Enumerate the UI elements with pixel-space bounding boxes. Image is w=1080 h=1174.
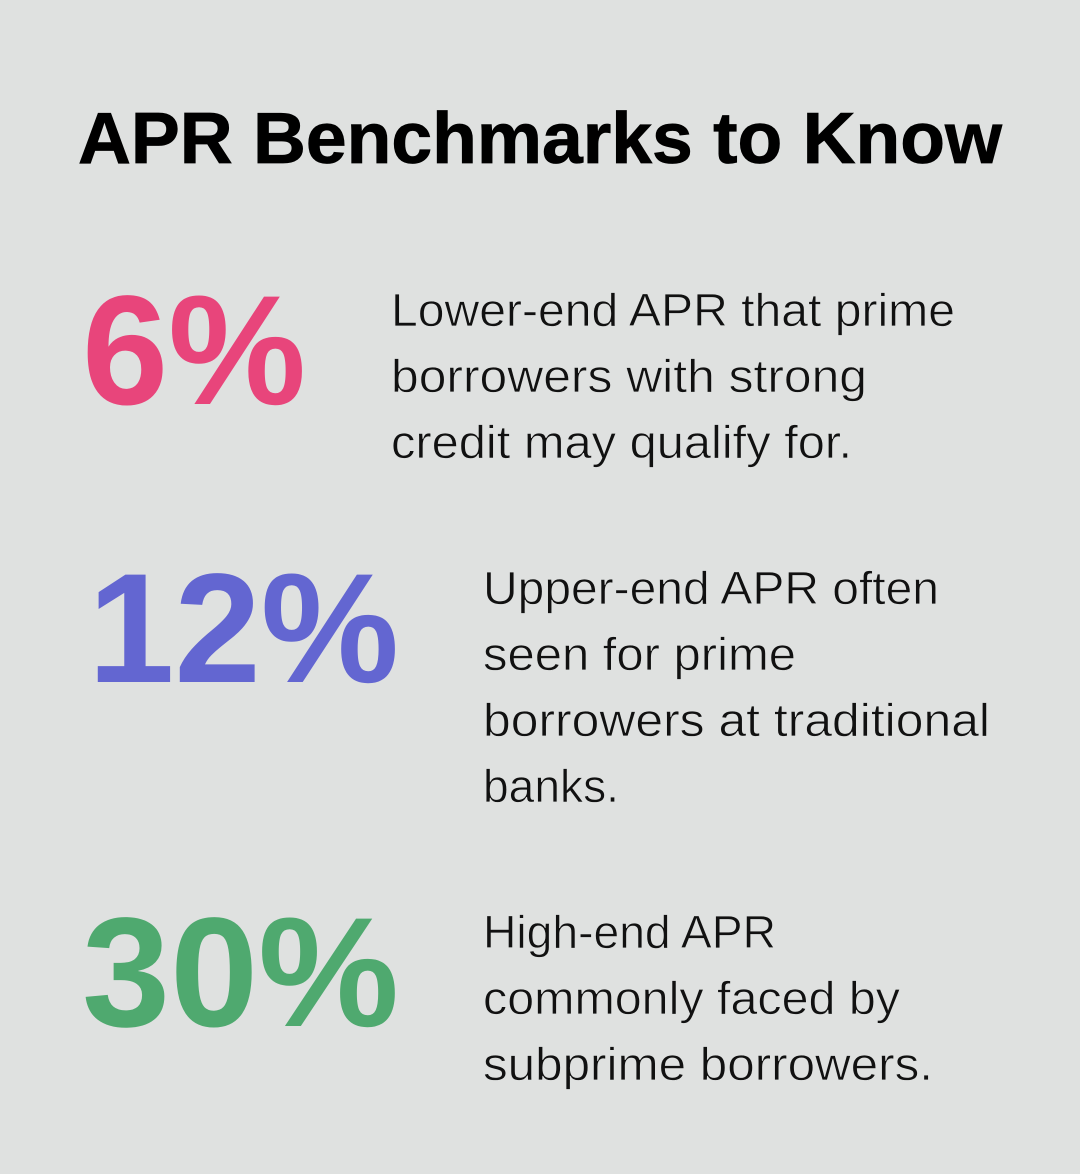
description: 30%: commonly faced by	[483, 972, 900, 1024]
stat: 12%	[88, 542, 990, 812]
description: 6%: Lower-end APR that prime	[391, 284, 955, 336]
description: 30%	[483, 906, 933, 1090]
description: 6%: credit may qualify for.	[391, 416, 852, 468]
stat: 6%	[82, 264, 955, 468]
number: 30%: 30%	[82, 886, 399, 1060]
description: 12%	[483, 562, 990, 812]
title: APR Benchmarks to Know	[78, 99, 1003, 179]
description: 30%: subprime borrowers.	[483, 1038, 933, 1090]
stat: 30%	[82, 886, 933, 1090]
description: 6%: borrowers with strong	[391, 350, 867, 402]
description: 12%: Upper-end APR often	[483, 562, 939, 614]
number: 6%: 6%	[82, 264, 306, 438]
description: 6%	[391, 284, 955, 468]
description: 30%: High-end APR	[483, 906, 776, 958]
description: 12%: borrowers at traditional	[483, 694, 990, 746]
description: 12%: seen for prime	[483, 628, 796, 680]
number: 12%: 12%	[88, 542, 399, 716]
description: 12%: banks.	[483, 760, 619, 812]
